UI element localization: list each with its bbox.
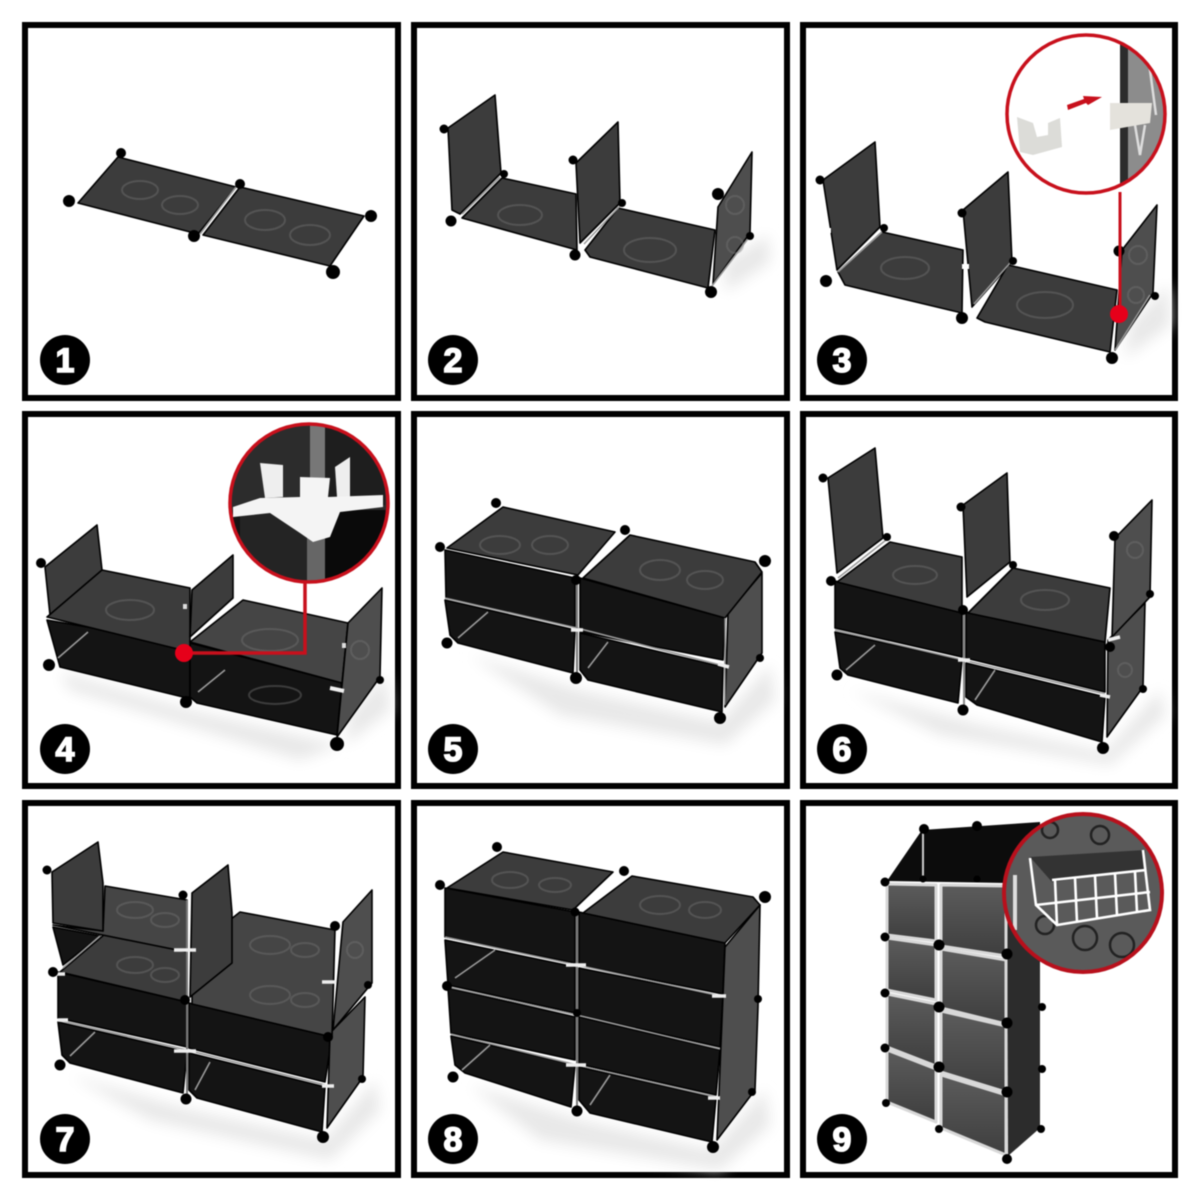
step number 7: 7 bbox=[56, 1121, 74, 1159]
finished wardrobe bbox=[887, 822, 1040, 1156]
connectors bbox=[42, 866, 372, 1143]
step number 2: 2 bbox=[444, 342, 462, 380]
callout leader line bbox=[1110, 192, 1128, 323]
step number 9: 9 bbox=[833, 1121, 851, 1159]
connectors bbox=[435, 498, 771, 724]
shelf unit bbox=[445, 507, 762, 712]
connectors bbox=[435, 842, 771, 1153]
panel: step 6 bbox=[803, 414, 1175, 786]
shelf unit bbox=[445, 852, 760, 1142]
callout: connector detail bbox=[230, 424, 388, 583]
step number 3 bbox=[817, 335, 867, 385]
callout leader line bbox=[175, 582, 305, 662]
step number 6: 6 bbox=[833, 731, 851, 769]
panel: step 2 bbox=[414, 25, 787, 398]
connectors bbox=[880, 821, 1046, 1164]
connectors bbox=[36, 558, 384, 751]
step number 7 bbox=[40, 1114, 90, 1164]
step number 8: 8 bbox=[444, 1121, 462, 1159]
shelf walls and floors bbox=[45, 525, 382, 737]
panel: step 9 bbox=[803, 803, 1175, 1175]
shelf unit bbox=[828, 448, 1152, 742]
panel: step 5 bbox=[414, 414, 787, 786]
panel: step 4 bbox=[25, 414, 398, 786]
step number 9 bbox=[817, 1114, 867, 1164]
connectors bbox=[63, 148, 377, 279]
shelf walls and floors bbox=[823, 142, 1157, 352]
icon: clip bbox=[1017, 117, 1062, 155]
step number 5: 5 bbox=[444, 731, 462, 769]
callout: clip detail bbox=[1007, 35, 1168, 193]
step number 5 bbox=[428, 724, 478, 774]
step number 1: 1 bbox=[56, 342, 74, 380]
step number 3: 3 bbox=[833, 342, 851, 380]
arrow: clip direction bbox=[1067, 96, 1102, 110]
panel: step 8 bbox=[414, 803, 787, 1175]
panel: step 3 bbox=[803, 25, 1175, 398]
step number 4: 4 bbox=[56, 731, 75, 769]
step number 1 bbox=[40, 335, 90, 385]
connectors bbox=[440, 124, 754, 298]
panel: step 7 bbox=[25, 803, 398, 1175]
panel: step 1 bbox=[25, 25, 398, 398]
shelf walls and floors bbox=[448, 95, 752, 288]
callout: wire basket detail bbox=[1004, 814, 1162, 972]
step number 2 bbox=[428, 335, 478, 385]
floor panels bbox=[78, 157, 364, 266]
step number 4 bbox=[40, 724, 90, 774]
step number 6 bbox=[817, 724, 867, 774]
shelf unit bbox=[52, 842, 372, 1132]
connectors bbox=[816, 176, 1159, 364]
connectors bbox=[818, 474, 1154, 754]
step number 8 bbox=[428, 1114, 478, 1164]
